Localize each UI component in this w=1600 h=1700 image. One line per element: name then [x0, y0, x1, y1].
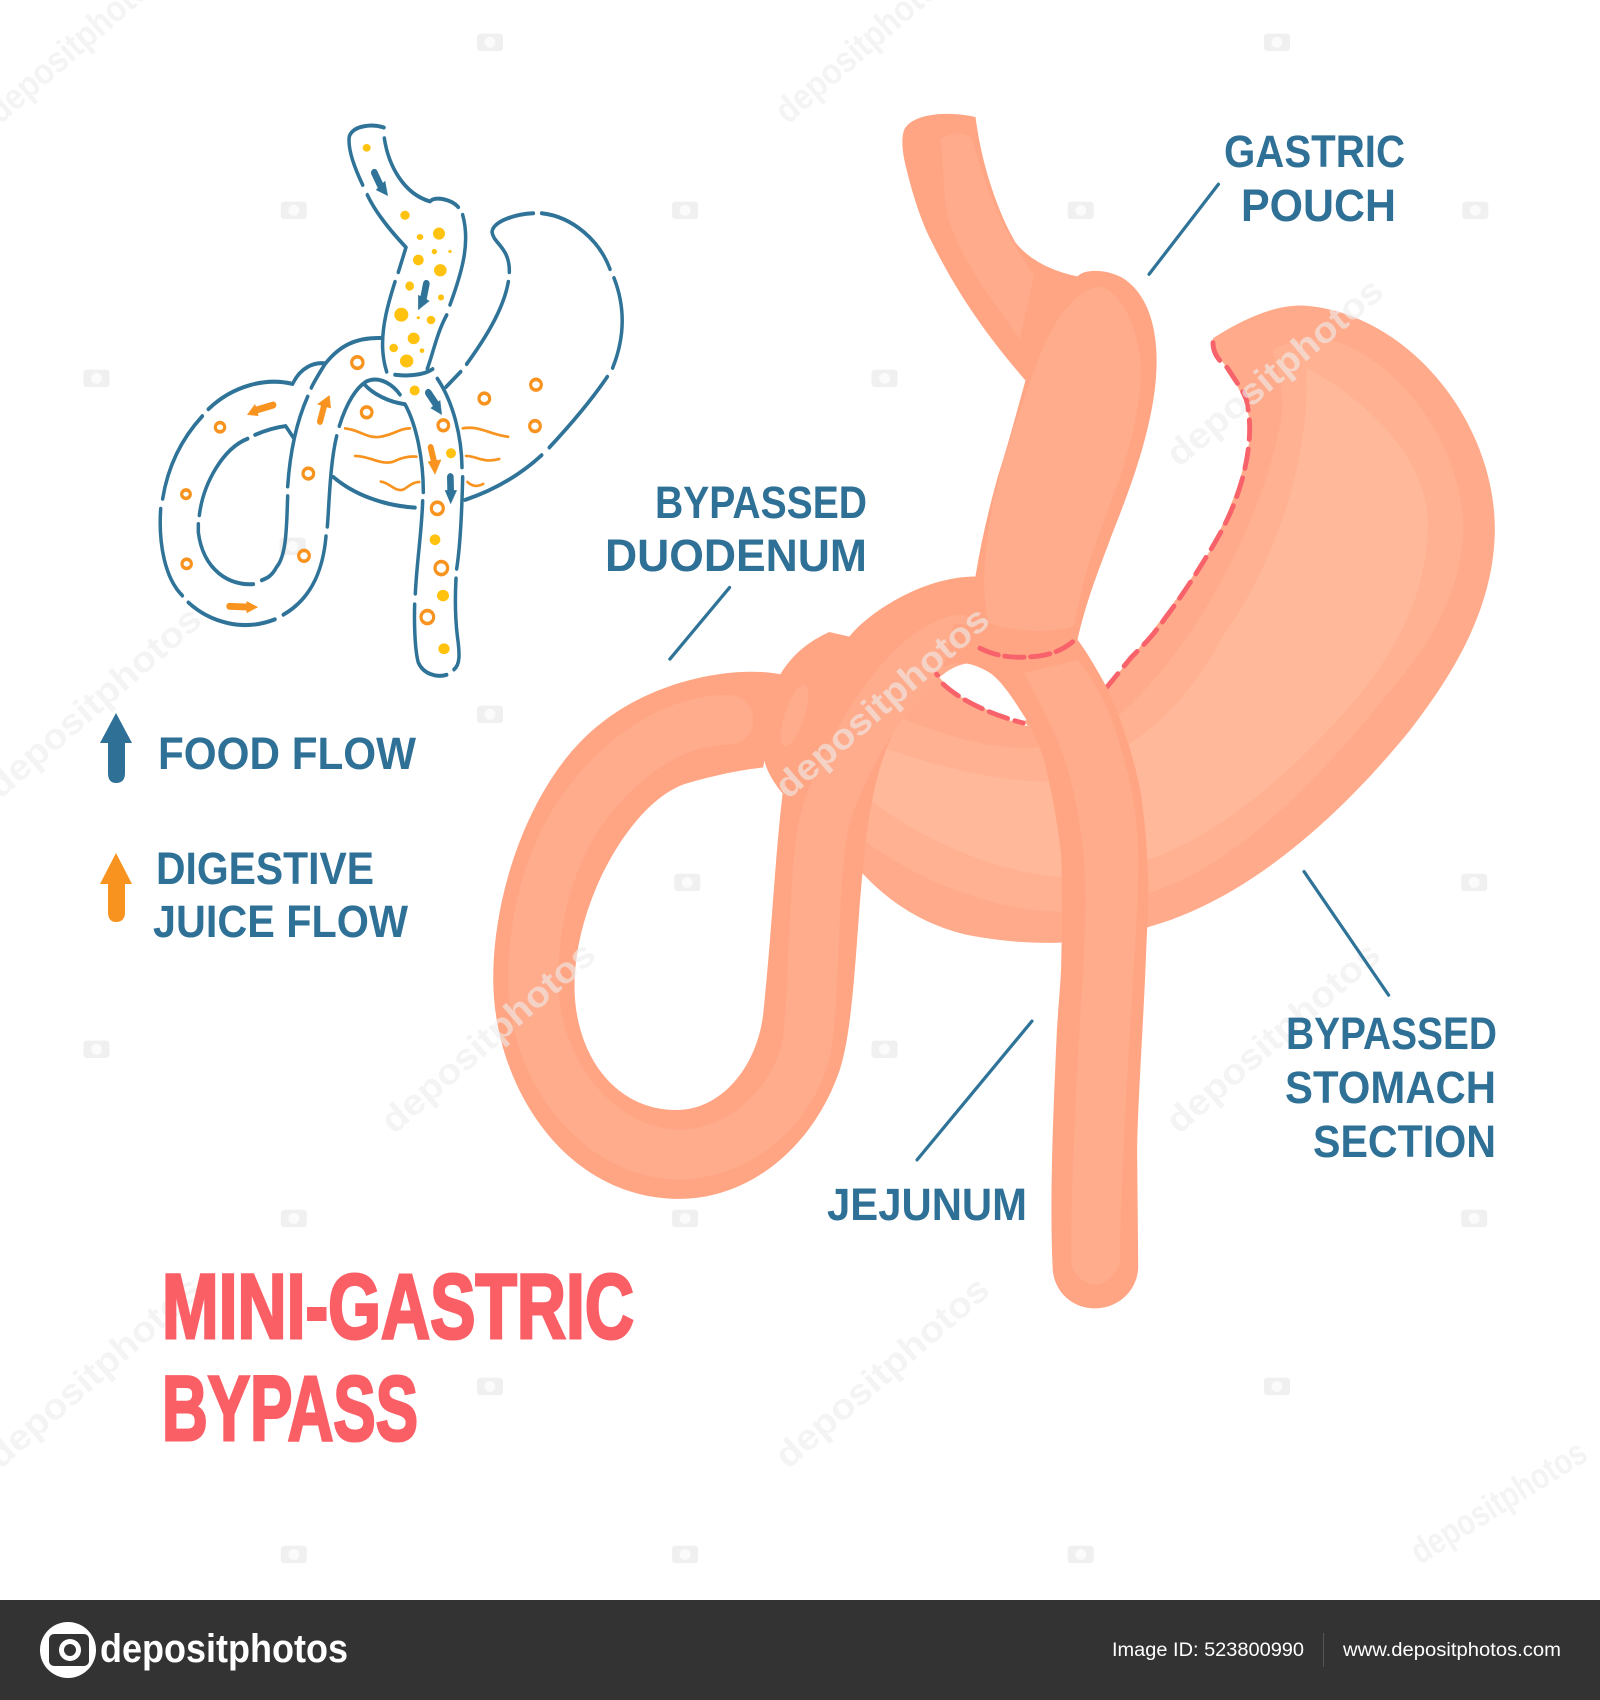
label: gastric pouch — [1224, 126, 1405, 231]
icon: blue arrow — [100, 713, 132, 783]
digestive juice rings — [182, 357, 541, 624]
main stomach bypass illustration — [493, 114, 1495, 1308]
title: MINI-GASTRIC — [162, 1256, 634, 1358]
diagram outlines — [160, 126, 622, 676]
food particles — [363, 144, 456, 654]
duodenum hump — [763, 632, 862, 793]
brand name: depositphotos — [100, 1627, 348, 1671]
legend: digestive juice flow: JUICE FLOW — [153, 896, 408, 947]
label: gastric pouch: GASTRIC — [1224, 126, 1405, 177]
label: bypassed stomach section: STOMACH — [1285, 1062, 1496, 1113]
digestive wavy lines — [345, 428, 508, 490]
blue food arrows — [374, 173, 457, 504]
watermarks: depositphotos — [1158, 269, 1391, 474]
orange juice arrows — [229, 395, 441, 613]
watermarks: depositphotos — [1157, 933, 1388, 1141]
watermarks: depositphotos — [372, 933, 603, 1141]
legend: digestive juice flow: DIGESTIVE — [156, 843, 374, 894]
bypassed stomach section — [775, 305, 1495, 943]
legend: food flow — [100, 713, 416, 783]
esophagus — [902, 114, 1084, 380]
footer bar — [0, 1600, 1600, 1700]
label: bypassed stomach section: SECTION — [1313, 1116, 1496, 1167]
pouch staple line — [980, 637, 1077, 657]
label: bypassed stomach section — [1285, 1008, 1497, 1167]
biliary loop — [493, 577, 981, 1199]
hole staple line — [937, 674, 1023, 723]
title: BYPASS — [162, 1358, 418, 1460]
image id: Image ID: 523800990 — [1112, 1640, 1304, 1661]
title — [162, 1256, 634, 1460]
icon: camera logo — [40, 1622, 96, 1678]
label: jejunum: JEJUNUM — [827, 1179, 1027, 1230]
icon: orange arrow — [100, 853, 132, 922]
label: bypassed duodenum: DUODENUM — [605, 530, 867, 581]
flow line diagram — [160, 126, 622, 676]
legend: food flow: FOOD FLOW — [158, 728, 416, 779]
label: bypassed duodenum — [605, 477, 867, 581]
stomach staple line — [1107, 343, 1250, 687]
label: gastric pouch: POUCH — [1241, 180, 1396, 231]
label: bypassed stomach section: BYPASSED — [1286, 1008, 1497, 1059]
legend: digestive juice flow — [100, 843, 408, 947]
jejunum limb — [943, 623, 1148, 1308]
watermarks: depositphotos — [766, 1268, 997, 1476]
opening between pouch and stomach — [938, 665, 1028, 726]
label: bypassed duodenum: BYPASSED — [655, 477, 867, 528]
leader lines — [670, 184, 1389, 1160]
watermarks: depositphotos — [766, 598, 997, 806]
gastric pouch — [970, 271, 1157, 655]
website: www.depositphotos.com — [1342, 1640, 1561, 1661]
